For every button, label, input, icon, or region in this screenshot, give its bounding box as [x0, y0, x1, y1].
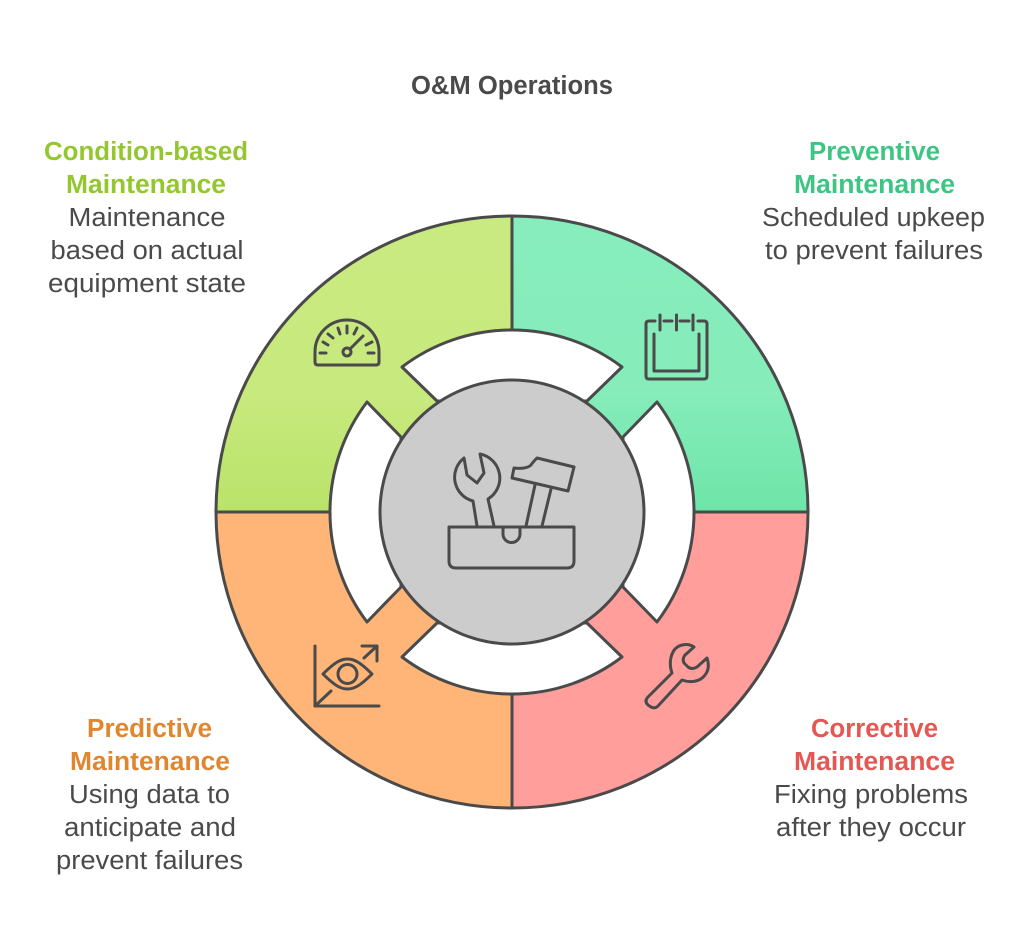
white gap: bottom: [402, 623, 622, 694]
panel: condition-based maintenance text: equipment state: [48, 270, 246, 298]
panel: condition-based maintenance text: [44, 138, 248, 298]
panel: predictive maintenance text: [56, 715, 243, 875]
panel: preventive maintenance text: to prevent failures: [765, 237, 983, 265]
icon: toolbox with wrench and hammer: [449, 454, 574, 568]
panel: condition-based maintenance text: based on actual: [50, 237, 244, 265]
panel: predictive maintenance text: Using data to: [69, 781, 230, 809]
panel: predictive maintenance text: prevent failures: [56, 847, 243, 875]
panel: preventive maintenance text: Scheduled upkeep: [762, 204, 985, 232]
panel: preventive maintenance text: [762, 138, 985, 265]
white gap: left: [330, 402, 401, 622]
center circle: [380, 380, 644, 644]
panel: predictive maintenance text: Maintenance: [70, 748, 230, 776]
panel: condition-based maintenance text: Maintenance: [66, 171, 226, 199]
panel: corrective maintenance text: after they occur: [776, 814, 967, 842]
icon: wrench: [646, 645, 708, 708]
icon: eye on growth chart: [315, 646, 379, 706]
panel: predictive maintenance text: Predictive: [87, 715, 212, 743]
panel: preventive maintenance text: Preventive: [809, 138, 940, 166]
icon: gauge: [315, 320, 379, 365]
panel: preventive maintenance text: Maintenance: [794, 171, 955, 199]
panel: corrective maintenance text: [774, 715, 968, 842]
panel: corrective maintenance text: Maintenance: [794, 748, 955, 776]
panel: condition-based maintenance text: Maintenance: [68, 204, 226, 232]
panel: predictive maintenance text: anticipate and: [64, 814, 236, 842]
segment: corrective quadrant: [512, 512, 808, 808]
title: O&M Operations: [411, 72, 613, 100]
segment: preventive quadrant: [512, 216, 808, 512]
cycle diagram: [216, 216, 808, 808]
icon: calendar: [646, 315, 707, 379]
segment: predictive quadrant: [216, 512, 512, 808]
white gap: right: [623, 402, 694, 622]
white gap: top: [402, 330, 622, 401]
panel: condition-based maintenance text: Condition-based: [44, 138, 248, 166]
segment: condition-based quadrant: [216, 216, 512, 512]
panel: corrective maintenance text: Fixing problems: [774, 781, 968, 809]
panel: corrective maintenance text: Corrective: [811, 715, 938, 743]
